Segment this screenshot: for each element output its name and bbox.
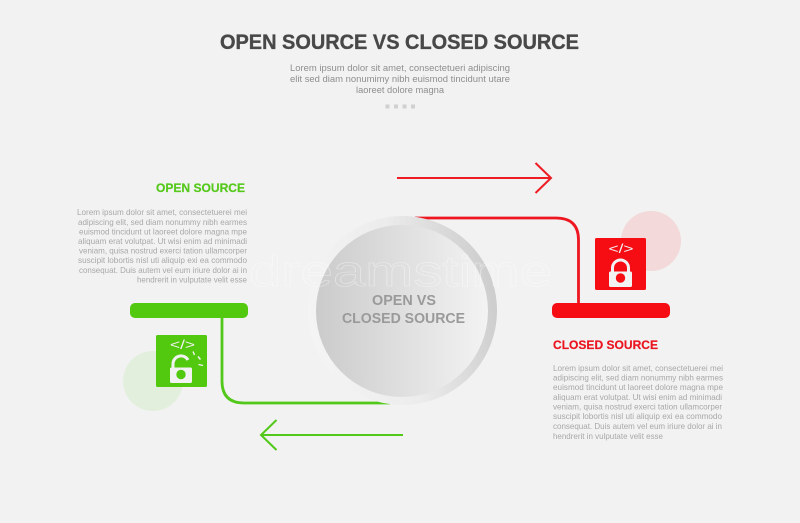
body text: closed source: veniam, quisa nostrud exerci tation ullamcorper (553, 402, 722, 412)
subtitle text: laoreet dolore magna (356, 85, 445, 96)
body text: open source (77, 207, 247, 284)
body text: open source: euismod tincidunt ut laoreet dolore magna mpe (79, 226, 247, 236)
title: OPEN SOURCE VS CLOSED SOURCE (220, 30, 579, 54)
outer ring (308, 216, 497, 405)
decorative circle: red (621, 211, 681, 271)
header dots (386, 104, 415, 108)
panel: open source (77, 181, 248, 411)
body text: open source: Lorem ipsum dolor sit amet, consectetuerei mei (77, 207, 247, 217)
body text: closed source: Lorem ipsum dolor sit amet, consectetuerei mei (553, 363, 723, 373)
icon: closed lock (595, 238, 646, 290)
icon: open lock (156, 335, 207, 387)
inner disc (316, 225, 488, 397)
body text: closed source: hendrerit in vulputate velit esse (553, 431, 663, 441)
body text: open source: adipiscing elit, sed diam nonummy nibh earmes (78, 217, 247, 227)
subtitle text (290, 63, 510, 96)
body text: open source: aliquam erat volutpat. Ut wisi enim ad minimadi (78, 236, 247, 246)
decorative circle: green (123, 351, 183, 411)
icon: closed lock: </> (608, 242, 634, 256)
bar: green (130, 303, 248, 318)
body text: open source: hendrerit in vulputate velit esse (137, 274, 247, 284)
body text: closed source: adipiscing elit, sed diam nonummy nibh earmes (553, 372, 723, 382)
connector: green (222, 317, 390, 403)
header (220, 30, 579, 108)
connector: red (415, 218, 578, 304)
body text: open source: consequat. Duis autem vel eum iriure dolor ai in (79, 265, 247, 275)
center label: CLOSED SOURCE (342, 311, 465, 327)
heading: closed source: CLOSED SOURCE (553, 338, 658, 352)
watermark: dreamstime (249, 247, 552, 296)
body text: closed source: euismod tincidunt ut laoreet dolore magna mpe (553, 382, 723, 392)
icon: open lock: </> (170, 338, 195, 352)
heading: open source: OPEN SOURCE (156, 181, 245, 195)
subtitle text: elit sed diam nonumimy nibh euismod tincidunt utare (290, 74, 510, 85)
subtitle text: Lorem ipsum dolor sit amet, consectetueri adipiscing (290, 63, 510, 74)
body text: open source: suscipit lobortis nisl uti aliquip exi ea commodo (78, 255, 247, 265)
center label: OPEN VS (372, 293, 436, 309)
body text: closed source: suscipit lobortis nisl uti aliquip exi ea commodo (553, 411, 722, 421)
central circle (308, 216, 497, 405)
body text: closed source: consequat. Duis autem vel eum iriure dolor ai in (553, 421, 722, 431)
arrow: green left (261, 420, 403, 450)
center label (342, 293, 465, 327)
body text: closed source: aliquam erat volutpat. Ut wisi enim ad minimadi (553, 392, 722, 402)
panel: closed source (552, 211, 723, 441)
arrow: red right (397, 163, 551, 193)
body text: open source: veniam, quisa nostrud exerci tation ullamcorper (79, 246, 247, 256)
body text: closed source (553, 363, 723, 441)
bar: red (552, 303, 670, 318)
